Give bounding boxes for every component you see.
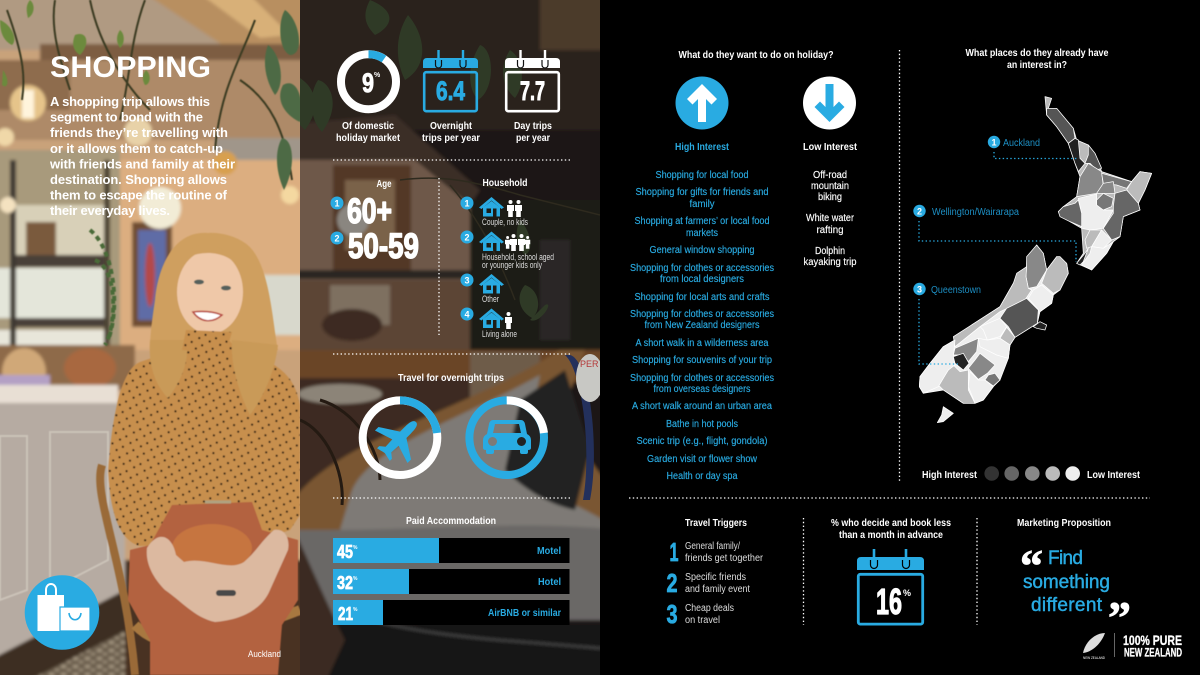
high interest list: Shopping for local arts and crafts (634, 292, 770, 303)
low interest list: White water (806, 213, 855, 224)
bar: airbnb: 21 (338, 604, 353, 624)
map: New Zealand regions by interest (919, 97, 1152, 423)
travel triggers (666, 518, 764, 629)
intro text block: or it allows them to catch-up (50, 141, 223, 156)
stat: domestic holiday market donut: 9 (362, 68, 374, 98)
photo caption: Auckland (248, 649, 281, 659)
high interest list: Health or day spa (666, 471, 738, 482)
high interest list: from overseas designers (654, 384, 751, 395)
bar: airbnb (333, 600, 561, 625)
household ranking: Living alone (482, 329, 517, 339)
bar: motel: Motel (537, 546, 561, 557)
household ranking: Household (482, 178, 528, 189)
travel triggers: 1 (670, 537, 678, 567)
map label: Queenstown (913, 283, 981, 364)
low interest list: biking (818, 192, 842, 203)
intro text block: destination. Shopping allows (50, 172, 227, 187)
low interest list: Off-road (813, 170, 847, 181)
photo: woman in Auckland cafe (0, 0, 320, 675)
south island (919, 245, 1068, 423)
travel triggers: 3 (666, 599, 678, 629)
face (177, 250, 243, 334)
marketing proposition: something (1023, 572, 1110, 593)
heading: holiday wants: What do they want to do on holiday? (678, 50, 834, 61)
icon: silver fern (1083, 633, 1105, 653)
intro text block: A shopping trip allows this (50, 94, 210, 109)
household ranking: 4 (464, 310, 470, 320)
stat: day trips calendar (505, 50, 560, 144)
intro text block: with friends and family at their (49, 156, 235, 171)
high interest list (630, 142, 774, 482)
booking lead-time calendar (831, 518, 951, 624)
icon: plane donut (363, 400, 437, 475)
bar: motel: % (353, 545, 358, 551)
travel triggers: friends get together (685, 553, 764, 564)
icon: car donut (469, 400, 544, 475)
stat: overnight trips calendar: Overnight (430, 121, 473, 132)
marketing proposition: Marketing Proposition (1017, 518, 1111, 529)
high interest list: markets (686, 228, 718, 239)
marketing proposition: different (1031, 595, 1103, 616)
bar: motel (333, 538, 561, 563)
booking lead-time calendar: % (903, 588, 911, 598)
map label: Wellington/Wairarapa: 2 (917, 206, 922, 216)
high interest list: A short walk around an urban area (632, 401, 773, 412)
photo: darkened cafe background (300, 0, 600, 675)
household ranking: 3 (464, 276, 470, 286)
travel triggers: General family/ (685, 541, 740, 552)
stat: domestic holiday market donut: % (374, 72, 381, 79)
bar: hotel: % (353, 576, 358, 582)
high interest list: from New Zealand designers (644, 320, 760, 331)
marketing proposition: “ (1020, 540, 1043, 591)
hair strands over blouse (150, 340, 278, 415)
travel triggers: on travel (685, 615, 720, 626)
high interest list: Garden visit or flower show (647, 454, 758, 465)
photo: darkened cafe background: PER (580, 359, 599, 369)
stat: overnight trips calendar: trips per year (422, 133, 480, 144)
booking lead-time calendar: 16 (876, 581, 902, 622)
hair back (150, 233, 278, 350)
travel triggers: and family event (685, 584, 750, 595)
pants (128, 502, 298, 675)
map label: Auckland: 1 (991, 138, 997, 148)
household ranking: Household, school aged (482, 252, 554, 262)
map label: Queenstown: 3 (917, 284, 922, 294)
map label: Queenstown: Queenstown (931, 285, 981, 296)
low interest list: Low Interest (803, 142, 858, 153)
booking lead-time calendar: than a month in advance (839, 530, 943, 541)
high interest list: Shopping for souvenirs of your trip (632, 355, 773, 366)
title: SHOPPING (50, 51, 211, 84)
stat: domestic holiday market donut (336, 54, 401, 144)
map legend (922, 466, 1141, 481)
stat: day trips calendar: per year (516, 133, 550, 144)
heading: places of interest (966, 48, 1109, 71)
paid accommodation bar chart: Paid Accommodation (406, 516, 496, 527)
household ranking: 2 (464, 232, 470, 242)
age ranking: 2 (334, 234, 340, 244)
travel for overnight trips: Travel for overnight trips (398, 373, 504, 384)
blouse (108, 335, 300, 546)
logo: 100% Pure New Zealand: 100% PURE (1123, 632, 1182, 648)
icon: low interest arrow (803, 76, 856, 130)
high interest list: from local designers (660, 274, 744, 285)
right black panel (600, 0, 1200, 675)
household ranking (460, 178, 554, 339)
high interest list: Scenic trip (e.g., flight, gondola) (636, 436, 768, 447)
marketing proposition (1017, 518, 1131, 643)
map legend: High Interest (922, 470, 978, 481)
intro text block: them to escape the routine of (50, 188, 228, 203)
high interest list: Shopping for clothes or accessories (630, 309, 774, 320)
age ranking: 60+ (347, 192, 392, 231)
high interest list: Shopping for clothes or accessories (630, 373, 774, 384)
high interest list: Shopping for gifts for friends and (636, 187, 768, 198)
icon: shopping bags (25, 575, 99, 650)
map label: Auckland: Auckland (1003, 138, 1040, 149)
household ranking: or younger kids only (482, 260, 542, 270)
low interest list: mountain (811, 181, 849, 192)
heading: places of interest: What places do they already have (966, 48, 1109, 59)
map legend: Low Interest (1087, 470, 1141, 481)
age ranking (330, 179, 419, 266)
low interest list (803, 142, 858, 268)
bar: hotel: 32 (337, 573, 353, 593)
stat: overnight trips calendar: 6.4 (436, 76, 465, 106)
low interest list: Dolphin (815, 246, 845, 257)
low interest list: kayaking trip (804, 257, 857, 268)
high interest list: High Interest (675, 142, 730, 153)
household ranking: Couple, no kids (482, 217, 528, 227)
high interest list: Shopping for clothes or accessories (630, 263, 774, 274)
bar: hotel: Hotel (538, 577, 561, 588)
booking lead-time calendar: % who decide and book less (831, 518, 951, 529)
bar: motel: 45 (337, 542, 353, 562)
age ranking: 1 (334, 198, 340, 208)
north island (1045, 97, 1152, 270)
age ranking: Age (376, 179, 392, 190)
marketing proposition: Find (1048, 548, 1083, 569)
bar: airbnb: AirBNB or similar (488, 608, 561, 619)
high interest list: Shopping at farmers’ or local food (634, 216, 770, 227)
map label: Wellington/Wairarapa (913, 205, 1076, 262)
paid accommodation bar chart (333, 516, 570, 625)
bar: airbnb: % (353, 607, 358, 613)
bar: hotel (333, 569, 561, 594)
travel triggers: Cheap deals (685, 603, 734, 614)
hands (147, 530, 288, 622)
high interest list: A short walk in a wilderness area (636, 338, 769, 349)
stat: domestic holiday market donut: Of domestic (342, 121, 394, 132)
travel triggers: 2 (666, 568, 678, 598)
logo: 100% Pure New Zealand (1083, 632, 1182, 660)
intro text block (49, 94, 235, 218)
high interest list: Shopping for local food (656, 170, 748, 181)
high interest list: General window shopping (650, 245, 754, 256)
low interest list: rafting (816, 225, 844, 236)
icon: high interest arrow (676, 76, 728, 130)
high interest list: Bathe in hot pools (666, 419, 738, 430)
stat: domestic holiday market donut: holiday market (336, 133, 401, 144)
household ranking: Other (482, 294, 499, 304)
travel triggers: Travel Triggers (685, 518, 747, 529)
high interest list: family (690, 199, 715, 210)
stat: overnight trips calendar (422, 50, 480, 144)
stat: day trips calendar: 7.7 (520, 76, 545, 106)
marketing proposition: ” (1108, 592, 1131, 643)
intro text block: their everyday lives. (50, 203, 170, 218)
household ranking: 1 (464, 198, 470, 208)
travel for overnight trips (363, 373, 544, 475)
intro text block: friends they’re travelling with (50, 125, 228, 140)
travel triggers: Specific friends (685, 572, 746, 583)
age ranking: 50-59 (348, 227, 419, 266)
intro text block: segment to bond with the (50, 110, 203, 125)
logo: 100% Pure New Zealand: NEW ZEALAND (1083, 656, 1105, 660)
map label: Auckland (988, 136, 1078, 158)
heading: places of interest: an interest in? (1007, 60, 1067, 71)
stat: day trips calendar: Day trips (514, 121, 552, 132)
map label: Wellington/Wairarapa: Wellington/Wairarapa (932, 207, 1019, 218)
